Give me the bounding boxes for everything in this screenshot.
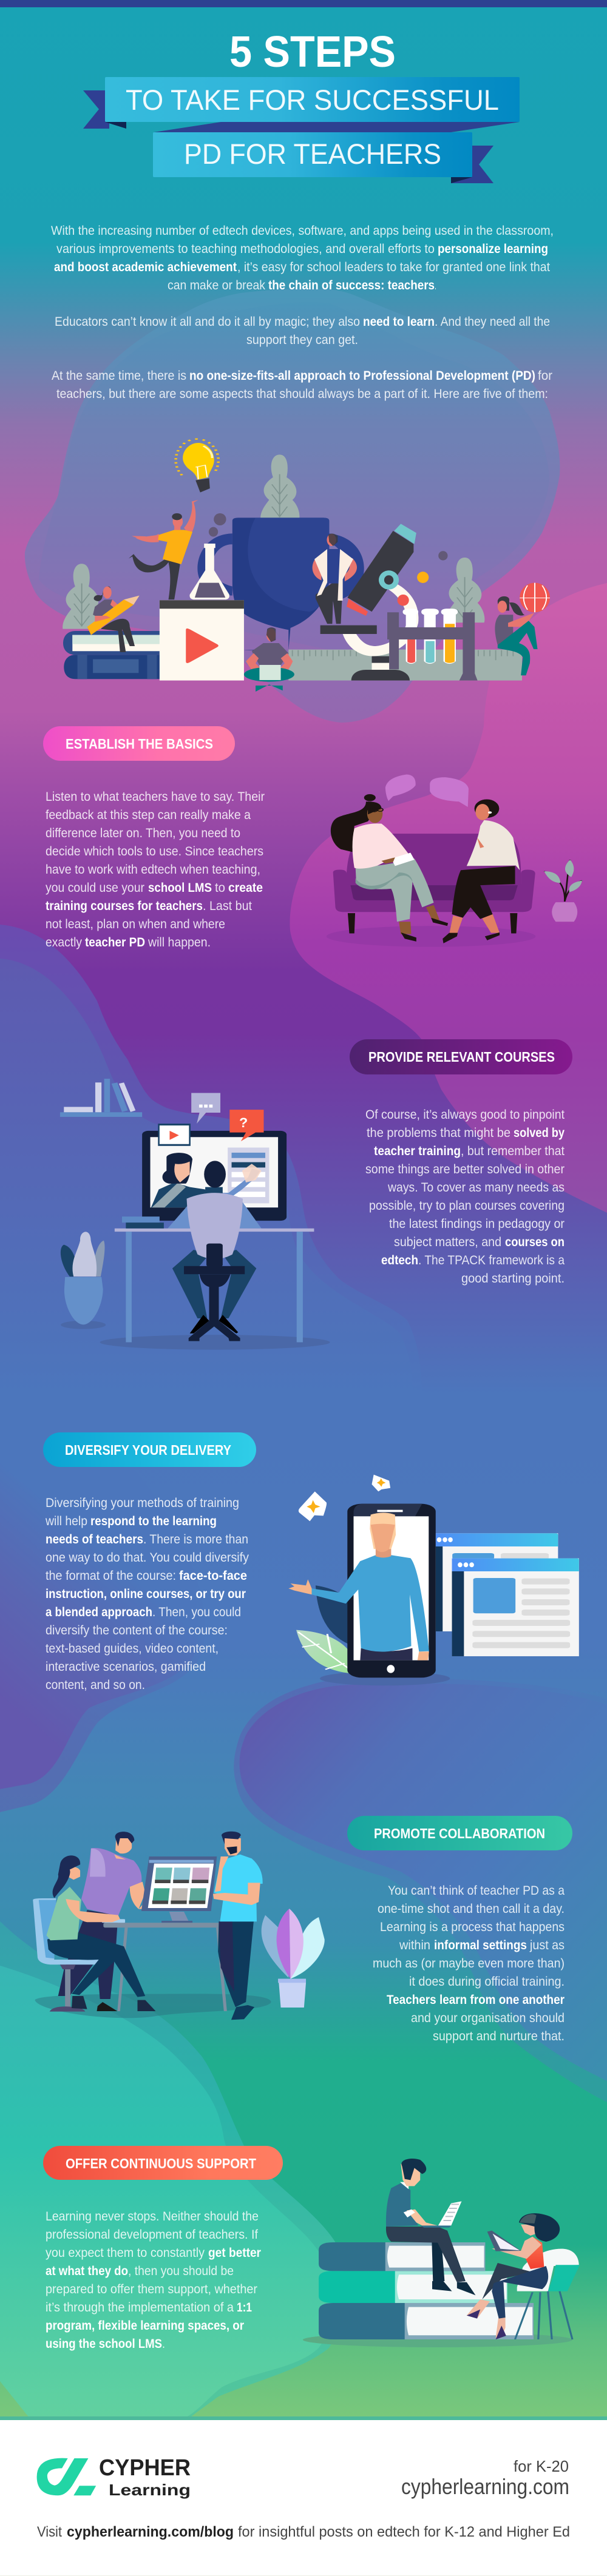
footer right: for K-20 and site: for K-20 xyxy=(514,2457,569,2475)
icon: light bulb xyxy=(176,439,219,493)
step 5 body text: using the school LMS xyxy=(46,2337,162,2351)
shadow xyxy=(100,1335,330,1350)
step 2 body text: solved by xyxy=(514,1126,565,1140)
step 2 body text: teacher training xyxy=(374,1144,461,1158)
step 4 body text: You can’t think of teacher PD as a xyxy=(388,1884,565,1898)
plant in pot xyxy=(544,860,582,922)
footer blog line: cypherlearning.com/blog xyxy=(67,2524,234,2540)
phone shadow xyxy=(320,1671,450,1685)
step 2 body text: good starting point. xyxy=(461,1272,565,1286)
step 2 body text: ways. To cover as many needs as xyxy=(387,1181,565,1195)
phone xyxy=(347,1504,436,1677)
intro text: support they can get. xyxy=(246,333,358,347)
intro text: teachers, but there are some aspects that should always be a part of it. Here are five of them: xyxy=(56,387,548,401)
step 1 body text: not least, plan on when and where xyxy=(46,917,225,931)
step 2 body text: possible, try to plan courses covering xyxy=(369,1199,565,1213)
intro text: for xyxy=(538,369,552,383)
step 4 body text: informal settings xyxy=(434,1938,527,1952)
ribbon banner: PD FOR TEACHERS xyxy=(184,138,441,170)
step 3 body text: Diversifying your methods of training xyxy=(46,1496,239,1510)
step 5 body text: 1:1 xyxy=(237,2301,252,2315)
seated woman xyxy=(47,1855,155,2011)
leaves xyxy=(296,1585,350,1673)
step 4 heading pill xyxy=(347,1816,572,1850)
monitor xyxy=(142,1131,287,1221)
step 4 body text: and your organisation should xyxy=(411,2011,565,2025)
ribbon banner xyxy=(83,77,520,183)
desk xyxy=(115,1216,314,1342)
step 1 body text: . Last but xyxy=(203,899,252,913)
step 3 body text: content, and so on. xyxy=(46,1678,145,1692)
icon: flask xyxy=(189,544,229,599)
man in purple xyxy=(58,1832,176,1999)
step 1 body text: to xyxy=(215,881,225,895)
step 1 heading pill xyxy=(43,726,235,761)
step 3 illustration: man in phone xyxy=(288,1475,579,1685)
background blob: lower left purple xyxy=(0,1456,205,1812)
step 1 body text: exactly xyxy=(46,936,82,949)
icon: microscope xyxy=(343,524,418,681)
plant xyxy=(262,1909,325,2008)
step 1 body text: teacher PD xyxy=(85,936,145,949)
title xyxy=(83,28,520,183)
floating dots xyxy=(209,513,448,583)
step 4 panel: promote collaboration xyxy=(33,1816,572,2043)
step 4 body text: within xyxy=(399,1938,430,1952)
step 3 body text: will help xyxy=(45,1514,87,1528)
step 5 body text: , then you should be xyxy=(128,2264,234,2278)
step 5 body text: professional development of teachers. If xyxy=(46,2228,258,2242)
step 2 body text: some things are better solved in other xyxy=(365,1162,565,1176)
person: woman with ball xyxy=(495,583,550,675)
sofa xyxy=(333,834,535,933)
step 5 illustration: two people on books xyxy=(303,2159,580,2347)
logo: Cypher Learning xyxy=(37,2455,191,2499)
intro text: can make or break xyxy=(168,278,265,292)
step 2 body text xyxy=(365,1108,565,1286)
step 5 heading pill: OFFER CONTINUOUS SUPPORT xyxy=(66,2156,256,2171)
background blob: teal lower left xyxy=(0,1921,345,2418)
step 5 body text: prepared to offer them support, whether xyxy=(46,2282,257,2296)
step 1 heading pill: ESTABLISH THE BASICS xyxy=(66,736,213,752)
video window icon xyxy=(158,1124,191,1146)
step 3 body text: face-to-face xyxy=(179,1569,247,1583)
step 3 body text: a blended approach xyxy=(46,1605,152,1619)
step 1 body text: will happen. xyxy=(148,936,211,949)
step 2 body text: Of course, it’s always good to pinpoint xyxy=(365,1108,565,1122)
footer right: for K-20 and site xyxy=(401,2457,569,2499)
footer right: for K-20 and site: cypherlearning.com xyxy=(401,2474,569,2499)
shadow xyxy=(327,926,535,947)
step 1 body text: have to work with edtech when teaching, xyxy=(46,863,260,877)
icon: logo mark xyxy=(37,2458,96,2495)
woman with tablet xyxy=(467,2213,560,2339)
step 1 body text: create xyxy=(228,881,263,895)
step 5 body text: get better xyxy=(208,2246,261,2260)
chair xyxy=(515,2249,580,2339)
icon: trophy mug xyxy=(197,518,364,650)
step 5 body text: at what they do xyxy=(46,2264,128,2278)
intro text: the chain of success: teachers xyxy=(268,278,435,292)
background blob: blue left xyxy=(0,925,422,1456)
browser windows xyxy=(436,1533,579,1656)
footer blog line xyxy=(37,2524,570,2540)
potted plant xyxy=(61,1232,106,1329)
step 4 body text: Teachers learn from one another xyxy=(387,1993,565,2007)
step 4 body text: one-time shot and then call it a day. xyxy=(378,1902,565,1916)
step 4 body text: Learning is a process that happens xyxy=(380,1920,565,1934)
step 1 body text: you could use your xyxy=(46,881,144,895)
footer band xyxy=(0,2416,607,2576)
speech bubbles xyxy=(385,774,469,807)
man figure xyxy=(288,1512,429,1661)
icon: test tubes xyxy=(387,609,478,681)
step 2 body text: the problems that might be xyxy=(367,1126,510,1140)
intro text xyxy=(51,224,554,401)
logo: Cypher Learning: Learning xyxy=(109,2481,191,2499)
step 2 heading pill: PROVIDE RELEVANT COURSES xyxy=(368,1049,555,1065)
step 5 body text: program, flexible learning spaces, or xyxy=(46,2319,244,2333)
person: woman with pencil xyxy=(87,587,140,652)
step 5 panel: offer continuous support xyxy=(43,2146,580,2351)
shelf with books xyxy=(60,1079,142,1117)
intro text: . xyxy=(435,278,436,292)
intro text: At the same time, there is xyxy=(52,369,186,383)
step 4 heading pill: PROMOTE COLLABORATION xyxy=(374,1826,545,1841)
step 5 body text: . xyxy=(162,2337,165,2351)
shadow xyxy=(35,1994,271,2018)
step 3 body text: needs of teachers xyxy=(46,1532,143,1546)
chair xyxy=(33,1898,99,2012)
intro text: no one-size-fits-all approach to Professional Development (PD) xyxy=(189,369,535,383)
intro text: . And they need all the xyxy=(435,315,550,329)
background blob: lower right purple xyxy=(234,1678,607,2102)
step 4 body text xyxy=(373,1884,565,2043)
intro text: Educators can’t know it all and do it all by magic; they also xyxy=(55,315,360,329)
step 1 body text: Listen to what teachers have to say. Their xyxy=(46,790,265,804)
step 5 body text: you expect them to constantly xyxy=(46,2246,205,2260)
step 2 illustration: person at monitor xyxy=(60,1079,330,1350)
ribbon banner: TO TAKE FOR SUCCESSFUL xyxy=(126,84,499,116)
top bar xyxy=(0,0,607,7)
step 1 illustration: two women on sofa xyxy=(327,774,582,947)
logo: Cypher Learning: CYPHER xyxy=(99,2455,191,2481)
seated person from behind xyxy=(168,1161,262,1318)
step 5 body text: Learning never stops. Neither should the xyxy=(46,2210,259,2224)
step 3 body text: text-based guides, video content, xyxy=(46,1642,219,1656)
step 1 body text: difference later on. Then, you need to xyxy=(46,826,240,840)
step 1 body text: decide which tools to use. Since teachers xyxy=(46,845,263,858)
person: standing man in coat xyxy=(313,534,357,624)
background blob: pink right xyxy=(290,583,607,1213)
intro text: various improvements to teaching methodologies, and overall efforts to xyxy=(56,242,435,256)
intro text: , it’s easy for school leaders to take for granted one link that xyxy=(237,260,550,274)
intro text: With the increasing number of edtech devices, software, and apps being used in the classroom, xyxy=(51,224,554,238)
woman with clipboard xyxy=(331,794,448,942)
person: seated man with laptop xyxy=(244,627,294,692)
step 3 panel: diversify your delivery xyxy=(43,1432,579,1692)
step 3 body text: diversify the content of the course: xyxy=(46,1623,228,1637)
step 2 heading pill xyxy=(350,1039,572,1074)
step 5 heading pill xyxy=(43,2146,283,2180)
step 3 body text: instruction, online courses, or try our xyxy=(46,1587,246,1601)
icon: ruler xyxy=(288,650,522,681)
step 4 body text: much as (or maybe even more than) xyxy=(373,1957,565,1971)
step 3 body text: . There is more than xyxy=(143,1532,248,1546)
chat bubble xyxy=(191,1093,220,1124)
monitor xyxy=(141,1856,217,1923)
background blob: hero xyxy=(25,289,560,723)
shadow xyxy=(303,2332,572,2347)
step 1 body text: school LMS xyxy=(148,881,212,895)
man with laptop xyxy=(386,2159,475,2295)
step 2 body text: the latest findings in pedagogy or xyxy=(389,1217,565,1231)
step 5 body text xyxy=(46,2210,261,2351)
intro text: and boost academic achievement xyxy=(54,260,237,274)
step 4 illustration: three people at a desk xyxy=(33,1832,325,2020)
hero illustration xyxy=(63,439,550,692)
icon: plants xyxy=(63,454,484,629)
step 2 body text: . The TPACK framework is a xyxy=(418,1253,565,1267)
step 4 body text: it does during official training. xyxy=(409,1975,565,1989)
intro text: personalize learning xyxy=(438,242,548,256)
footer blog line: for insightful posts on edtech for K-12 and Higher Ed xyxy=(238,2524,570,2540)
star badges xyxy=(299,1475,390,1521)
icon: video box xyxy=(160,600,244,681)
person: jumping man xyxy=(129,500,198,599)
step 3 body text: interactive scenarios, gamified xyxy=(46,1660,206,1674)
step 1 body text xyxy=(46,790,265,949)
title line: 5 STEPS: 5 STEPS xyxy=(229,28,396,76)
step 3 body text: respond to the learning xyxy=(90,1514,217,1528)
step 3 body text xyxy=(45,1496,249,1692)
step 2 body text: subject matters, and xyxy=(394,1235,501,1249)
step 4 body text: just as xyxy=(529,1938,565,1952)
question bubble xyxy=(229,1110,263,1141)
intro text: need to learn xyxy=(363,315,435,329)
question bubble: ? xyxy=(239,1114,248,1130)
book stack xyxy=(319,2242,534,2339)
office chair xyxy=(184,1244,245,1341)
step 2 body text: courses on xyxy=(505,1235,565,1249)
desk xyxy=(102,1919,227,2011)
step 2 panel: provide relevant courses xyxy=(60,1039,572,1350)
step 2 body text: , but remember that xyxy=(461,1144,565,1158)
step 3 body text: . Then, you could xyxy=(152,1605,241,1619)
step 3 heading pill xyxy=(43,1432,256,1467)
step 3 body text: one way to do that. You could diversify xyxy=(46,1551,249,1565)
step 1 body text: training courses for teachers xyxy=(46,899,203,913)
man in cyan xyxy=(213,1832,263,2020)
step 4 body text: support and nurture that. xyxy=(433,2029,565,2043)
icon: books xyxy=(63,631,163,679)
footer blog line: Visit xyxy=(37,2524,62,2540)
step 3 heading pill: DIVERSIFY YOUR DELIVERY xyxy=(65,1442,231,1458)
step 2 body text: edtech xyxy=(381,1253,418,1267)
platform xyxy=(320,625,377,634)
step 1 body text: feedback at this step can really make a xyxy=(46,808,251,822)
step 3 body text: the format of the course: xyxy=(46,1569,176,1583)
step 1 panel: establish the basics xyxy=(43,726,582,949)
step 5 body text: it’s through the implementation of a xyxy=(46,2301,234,2315)
woman in cream top xyxy=(443,799,520,943)
